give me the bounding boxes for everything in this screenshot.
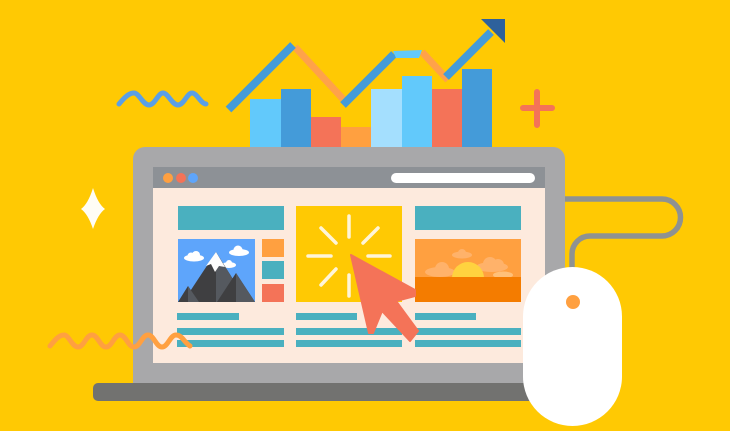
cursor arrow [351, 255, 418, 341]
centre column text lines [296, 313, 402, 347]
left column text lines [177, 313, 284, 347]
plus sign [523, 92, 552, 125]
left column header [178, 206, 284, 230]
address bar [391, 173, 535, 183]
orange squiggle [50, 335, 190, 347]
mouse button dot [566, 295, 580, 309]
bar chart [250, 69, 492, 147]
right column text lines [415, 313, 521, 347]
right column header [415, 206, 521, 230]
laptop base [93, 383, 543, 401]
trend line arrow [228, 19, 505, 110]
page background [153, 167, 545, 363]
sparkle star [81, 188, 105, 229]
colour swatches [262, 239, 284, 302]
laptop body [133, 147, 565, 383]
mouse cable [565, 199, 680, 270]
browser title bar [153, 167, 545, 188]
mountain photo [178, 239, 255, 302]
browser window [153, 167, 545, 363]
computer mouse [523, 267, 622, 426]
click burst [308, 216, 390, 296]
blue squiggle [119, 93, 206, 105]
centre yellow panel [296, 206, 402, 302]
sunset photo [415, 239, 521, 302]
window dots [163, 173, 198, 183]
